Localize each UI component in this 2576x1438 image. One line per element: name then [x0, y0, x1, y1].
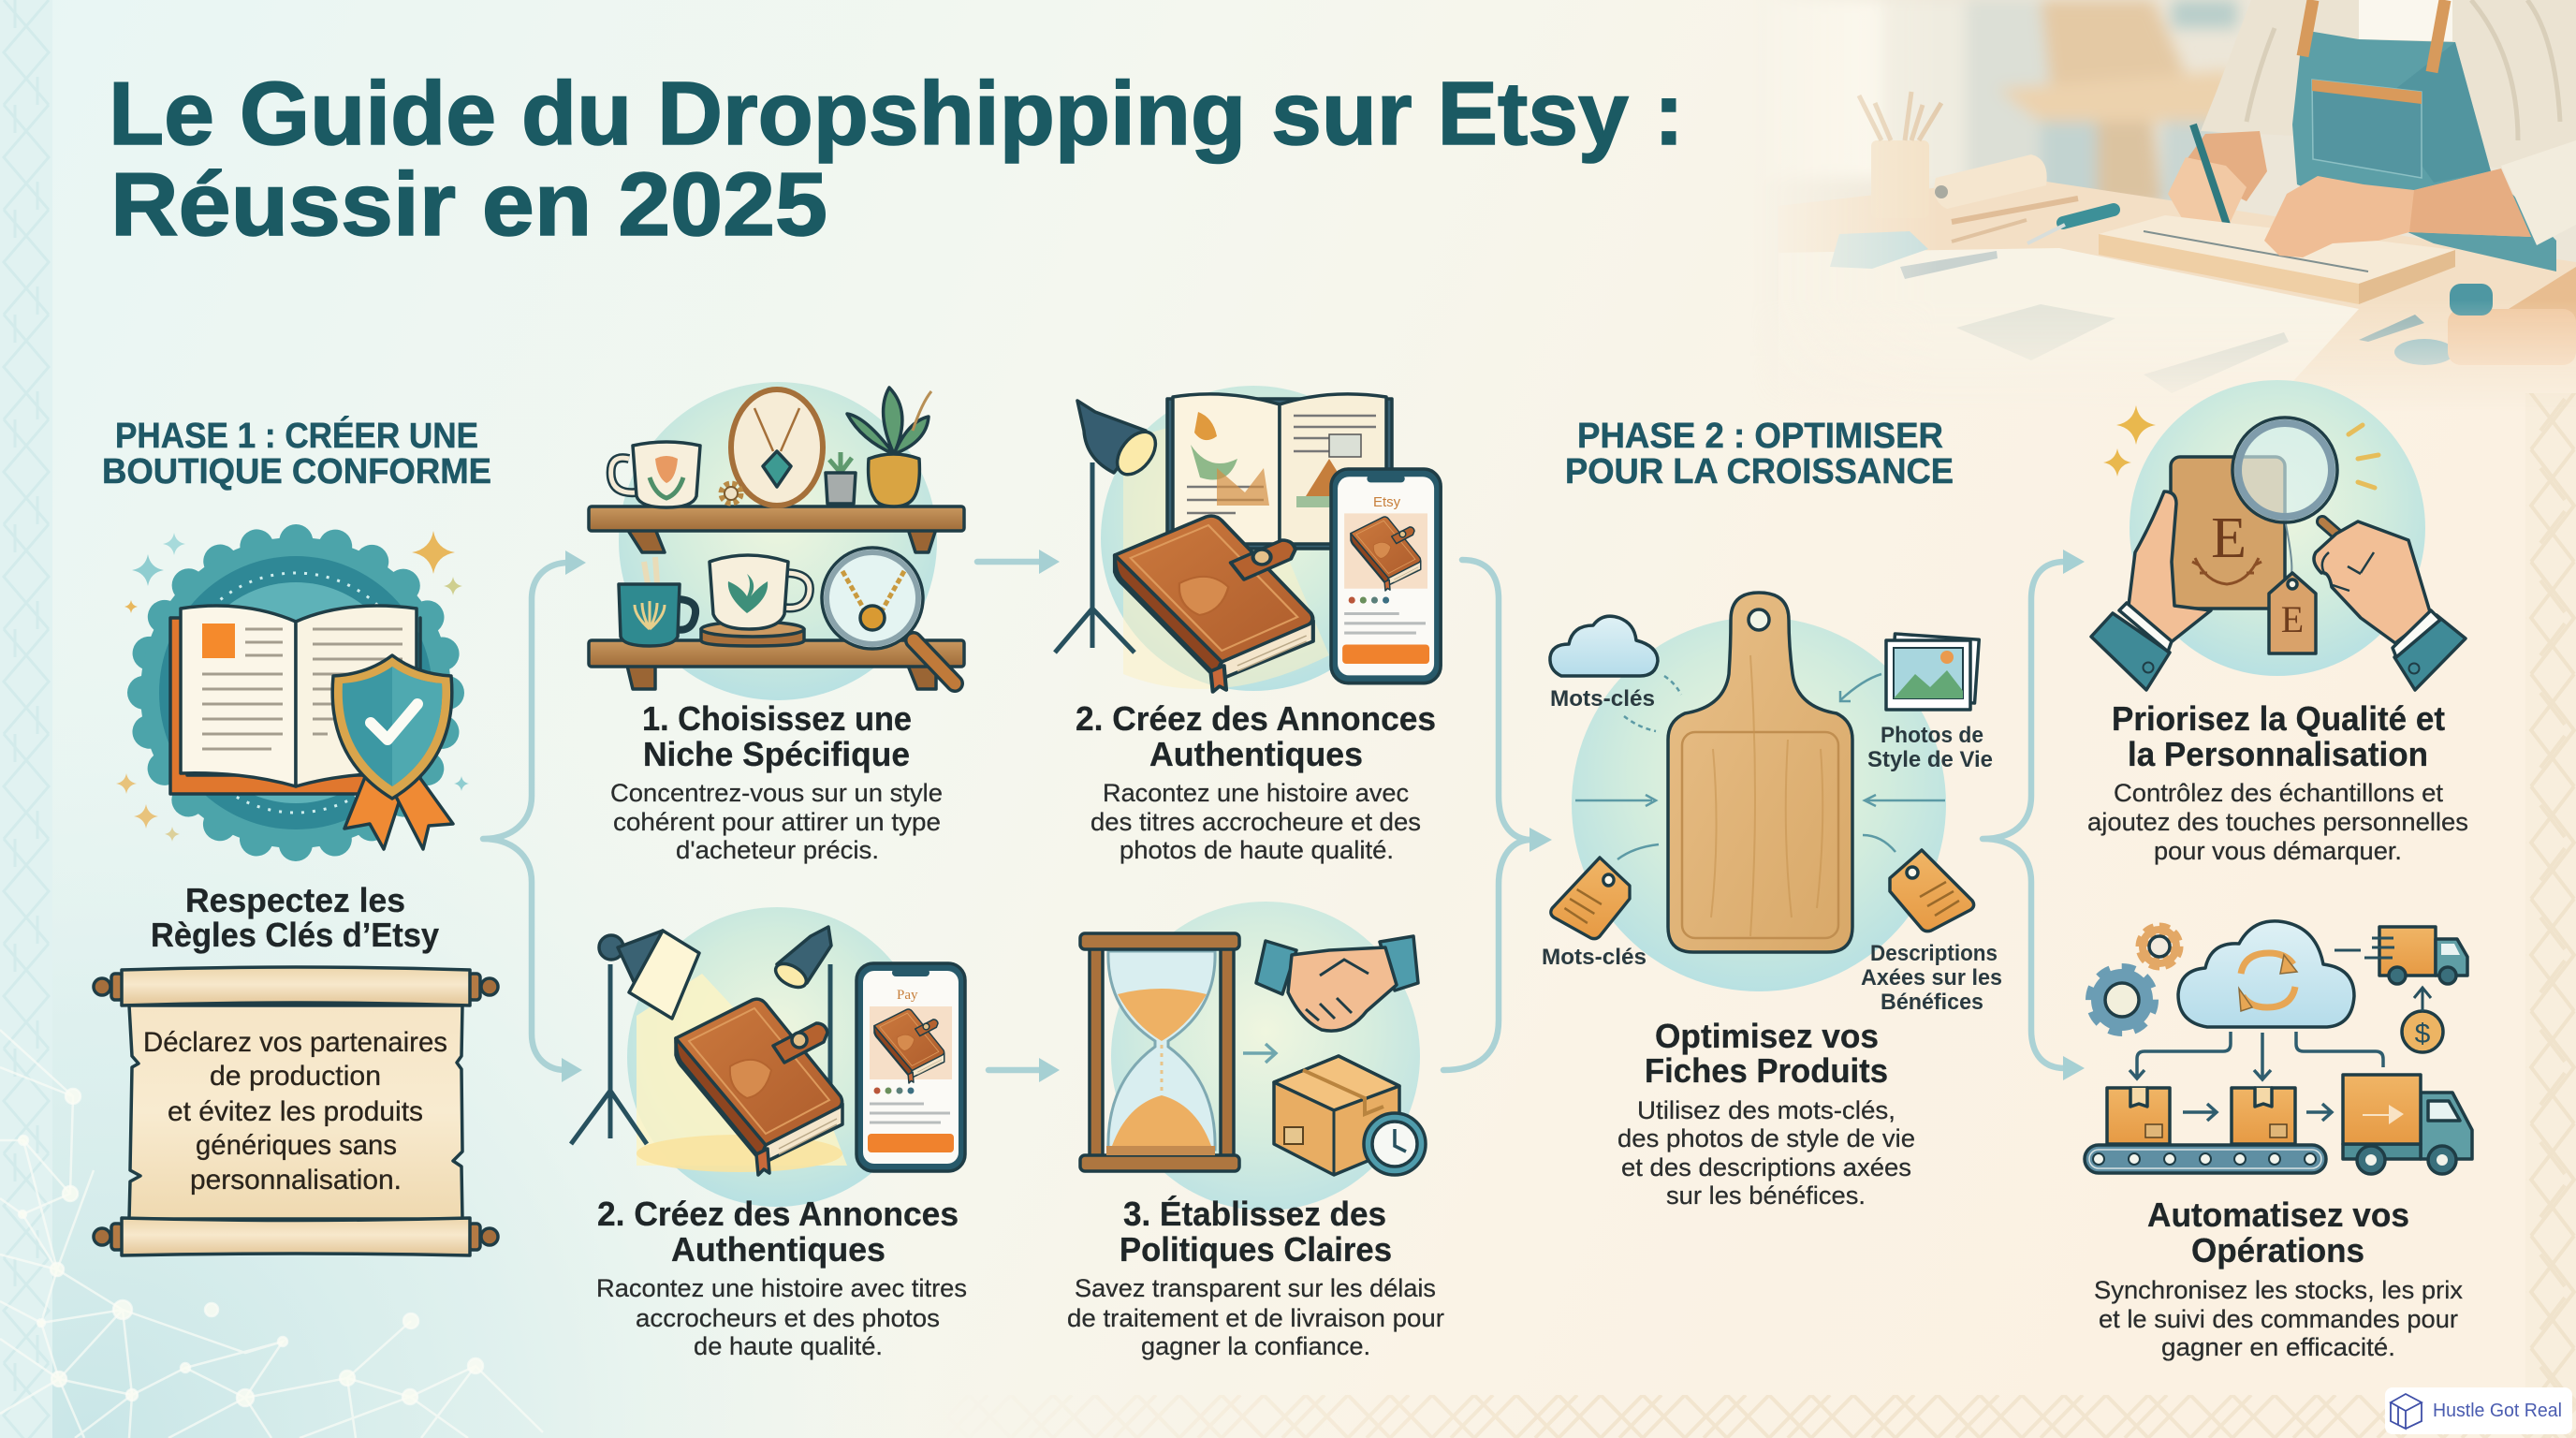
- text: step 1 description: cohérent pour attirer un type: [613, 808, 941, 836]
- delivery truck: [2343, 1075, 2472, 1174]
- coin: $: [2415, 1019, 2431, 1049]
- softbox on tripod: [571, 931, 699, 1144]
- sparkles: [2103, 405, 2378, 488]
- text: optimise description: Utilisez des mots-clés,: [1637, 1096, 1895, 1124]
- text: step 2 description: photos de haute qualité.: [1120, 836, 1394, 864]
- magnifier over necklace: [822, 548, 955, 683]
- text: step 2 bis description: de haute qualité.: [694, 1332, 883, 1360]
- text: optimise description: sur les bénéfices.: [1666, 1181, 1866, 1210]
- panel: optimise product sheets: [1542, 593, 2002, 1210]
- parcel box: [1274, 1056, 1399, 1175]
- panel: step 1 niche: [589, 382, 964, 864]
- heading: rules: [151, 881, 439, 954]
- lamp on tripod: [1055, 401, 1164, 653]
- title: Le Guide du Dropshipping sur Etsy :: [109, 64, 1684, 164]
- heading: step 1: [642, 699, 912, 773]
- phone with Etsy listing: Etsy: [1373, 494, 1401, 510]
- heading: step 2: Authentiques: [1149, 735, 1363, 773]
- text: optimise description: [1617, 1096, 1915, 1210]
- heading: quality: [2112, 699, 2445, 773]
- coin: [2402, 988, 2443, 1052]
- small succulent pot: [826, 452, 856, 504]
- photos label: [1867, 634, 1993, 772]
- forearm and hand holding pen: [2168, 124, 2267, 223]
- scroll text: génériques sans: [196, 1130, 397, 1161]
- decorative border: right: [2525, 393, 2576, 1438]
- tag descriptions: Descriptions: [1870, 941, 1998, 966]
- leather book: [676, 999, 842, 1175]
- cloud keyword: [1550, 616, 1658, 712]
- icon: shelves with mugs and jewellery: [589, 382, 964, 700]
- apron: [2292, 0, 2556, 271]
- heading: step 3: 3. Établissez des: [1123, 1195, 1386, 1233]
- arrow: converging bracket to phase 2: [1443, 560, 1552, 1070]
- icon: studio lights with book and phone: [571, 907, 965, 1207]
- heading: phase 2: [1565, 417, 1954, 492]
- text: step 1 description: [610, 779, 943, 864]
- engraved board: [2171, 457, 2285, 609]
- hanging tag: [2269, 520, 2316, 653]
- heading: step 2: 2. Créez des Annonces: [1076, 699, 1436, 738]
- engraved board: E: [2211, 506, 2247, 570]
- text: quality description: [2087, 779, 2468, 865]
- gears: [2095, 930, 2176, 1027]
- heading: step 2 bis: [597, 1195, 959, 1269]
- callout arrows: [1575, 674, 1945, 859]
- scroll text: et évitez les produits: [168, 1096, 423, 1127]
- phone with listing: Pay: [897, 988, 918, 1003]
- heading: rules: Respectez les: [185, 881, 405, 919]
- heading: step 3: [1120, 1195, 1392, 1269]
- icon: cloud automation workflow: [2085, 921, 2472, 1174]
- small truck: [2334, 927, 2467, 984]
- photos label: Photos de: [1881, 723, 1983, 748]
- heading: phase 1: BOUTIQUE CONFORME: [102, 452, 491, 492]
- cutting board: [1668, 593, 1852, 952]
- tag descriptions: Axées sur les: [1861, 965, 2002, 990]
- icon: photo setup with book and phone: [1055, 386, 1441, 692]
- photos label: Style de Vie: [1867, 747, 1993, 772]
- icon: hands inspecting engraved board: [2091, 380, 2466, 690]
- text: step 2 description: [1090, 779, 1421, 864]
- cloud keyword: Mots-clés: [1550, 686, 1655, 712]
- title: Réussir en 2025: [110, 154, 827, 255]
- handshake: [1256, 936, 1418, 1031]
- tag keyword: Mots-clés: [1542, 945, 1647, 970]
- shield with check: [332, 655, 452, 799]
- low-poly network background: [0, 1030, 543, 1438]
- arrow: step 2 to step 3: [988, 1058, 1060, 1082]
- hourglass: [1080, 933, 1239, 1171]
- bottom shelf: [589, 640, 964, 689]
- sparkles: [116, 531, 469, 842]
- text: quality description: Contrôlez des échantillons et: [2114, 779, 2444, 807]
- icon: rules badge with book and shield: [116, 531, 469, 849]
- heading: automate: Automatisez vos: [2147, 1196, 2409, 1234]
- open book: [1167, 394, 1392, 549]
- heading: step 1: Niche Spécifique: [643, 735, 910, 773]
- text: step 2 bis description: accrocheurs et des photos: [636, 1304, 940, 1332]
- scroll text: de production: [210, 1061, 381, 1092]
- conveyor belt: [2085, 1145, 2326, 1173]
- coaster and cream mug: [701, 555, 810, 646]
- heading: step 2 bis: 2. Créez des Annonces: [597, 1195, 959, 1233]
- panel: step 2 authentic listings (top): [1055, 386, 1441, 864]
- heading: quality: Priorisez la Qualité et: [2112, 699, 2445, 738]
- magnifier: [2232, 418, 2351, 547]
- heading: rules: Règles Clés d’Etsy: [151, 916, 439, 954]
- artisan workshop scene (top right): [1793, 0, 2576, 384]
- heading: phase 1: PHASE 1 : CRÉER UNE: [115, 415, 478, 456]
- heading: optimise: Fiches Produits: [1645, 1051, 1888, 1090]
- heading: optimise: [1645, 1017, 1888, 1090]
- hanging tag: E: [2281, 598, 2304, 640]
- arrow: phase 2 branching bracket: [1983, 550, 2085, 1080]
- heading: step 2 bis: Authentiques: [671, 1230, 886, 1269]
- heading: optimise: Optimisez vos: [1655, 1017, 1879, 1055]
- text: optimise description: et des descriptions axées: [1621, 1153, 1911, 1181]
- heading: phase 1: [102, 415, 491, 492]
- cloud with sync: [2178, 921, 2354, 1027]
- open book: [170, 606, 420, 794]
- framed necklace: [731, 389, 823, 506]
- tag keyword: [1542, 858, 1647, 970]
- text: step 1 description: d'acheteur précis.: [676, 836, 879, 864]
- phone with Etsy listing: [1331, 469, 1441, 683]
- desk lamp: [771, 927, 831, 1121]
- top shelf: [589, 506, 964, 552]
- scroll text: personnalisation.: [190, 1165, 402, 1196]
- wood block: [2099, 215, 2455, 304]
- text: quality description: ajoutez des touches personnelles: [2087, 808, 2468, 836]
- scroll bottom roller: [94, 1218, 498, 1255]
- plant: [847, 388, 931, 506]
- text: step 3 description: Savez transparent sur les délais: [1075, 1274, 1436, 1302]
- panel: step 3 clear policies: [1067, 902, 1444, 1360]
- decorative border: left: [0, 0, 52, 1438]
- watermark badge: [2385, 1387, 2572, 1434]
- right hand: [2314, 521, 2466, 690]
- watermark badge: Hustle Got Real: [2433, 1401, 2562, 1421]
- small gear: [722, 484, 740, 503]
- text: step 3 description: gagner la confiance.: [1141, 1332, 1370, 1360]
- shirt: [2201, 0, 2563, 140]
- icon: cutting board with callouts: [1542, 593, 2002, 1015]
- heading: step 1: 1. Choisissez une: [642, 699, 912, 738]
- text: step 2 bis description: [596, 1274, 967, 1360]
- heading: step 3: Politiques Claires: [1120, 1230, 1392, 1269]
- desk items: [1830, 92, 2576, 393]
- scroll with rules text: [94, 967, 498, 1255]
- text: quality description: pour vous démarquer.: [2154, 837, 2402, 865]
- heading: phase 2: POUR LA CROISSANCE: [1565, 452, 1954, 492]
- text: automate description: Synchronisez les stocks, les prix: [2094, 1276, 2464, 1304]
- heading: step 2: [1076, 699, 1436, 773]
- ribbon: [344, 777, 453, 849]
- leather book: [1115, 516, 1313, 692]
- left hand: [2091, 492, 2211, 690]
- heading: phase 2: PHASE 2 : OPTIMISER: [1577, 417, 1943, 456]
- text: step 2 description: Racontez une histoire avec: [1103, 779, 1409, 807]
- panel: automate operations: [2085, 921, 2472, 1361]
- parcels: [2107, 1088, 2295, 1144]
- teal mug: [619, 557, 695, 646]
- text: automate description: [2094, 1276, 2464, 1361]
- tag descriptions: [1861, 850, 2002, 1015]
- decorative border: bottom: [1131, 1395, 2576, 1438]
- scroll top roller: [94, 967, 498, 1005]
- mug: top cream: [611, 442, 700, 507]
- arrow: step 1 to step 2: [977, 550, 1060, 574]
- text: step 1 description: Concentrez-vous sur un style: [610, 779, 943, 807]
- scroll text: [143, 1027, 447, 1196]
- heading: automate: Opérations: [2191, 1231, 2364, 1269]
- text: step 3 description: [1067, 1274, 1444, 1360]
- panel: quality and personalisation: [2087, 380, 2468, 865]
- text: step 2 description: des titres accrocheure et des: [1090, 808, 1421, 836]
- connectors: [2130, 1032, 2383, 1121]
- heading: quality: la Personnalisation: [2128, 735, 2428, 773]
- scroll text: Déclarez vos partenaires: [143, 1027, 447, 1058]
- heading: automate: [2147, 1196, 2409, 1269]
- panel: step 2 authentic listings (bottom): [571, 907, 967, 1360]
- text: automate description: et le suivi des commandes pour: [2099, 1305, 2458, 1333]
- clock: [1364, 1113, 1426, 1175]
- text: automate description: gagner en efficacité.: [2161, 1333, 2395, 1361]
- icon: hourglass, handshake, parcel: [1080, 902, 1426, 1211]
- second hand and forearm: [2264, 140, 2576, 257]
- tag descriptions: Bénéfices: [1881, 990, 1983, 1015]
- text: step 3 description: de traitement et de livraison pour: [1067, 1304, 1444, 1332]
- title: [109, 64, 1684, 255]
- arrow: phase 1 branching bracket: [483, 550, 586, 1082]
- text: step 2 bis description: Racontez une histoire avec titres: [596, 1274, 967, 1302]
- small arrow: [1243, 1044, 1276, 1063]
- phone with listing: [856, 963, 965, 1171]
- text: optimise description: des photos de style de vie: [1617, 1124, 1915, 1152]
